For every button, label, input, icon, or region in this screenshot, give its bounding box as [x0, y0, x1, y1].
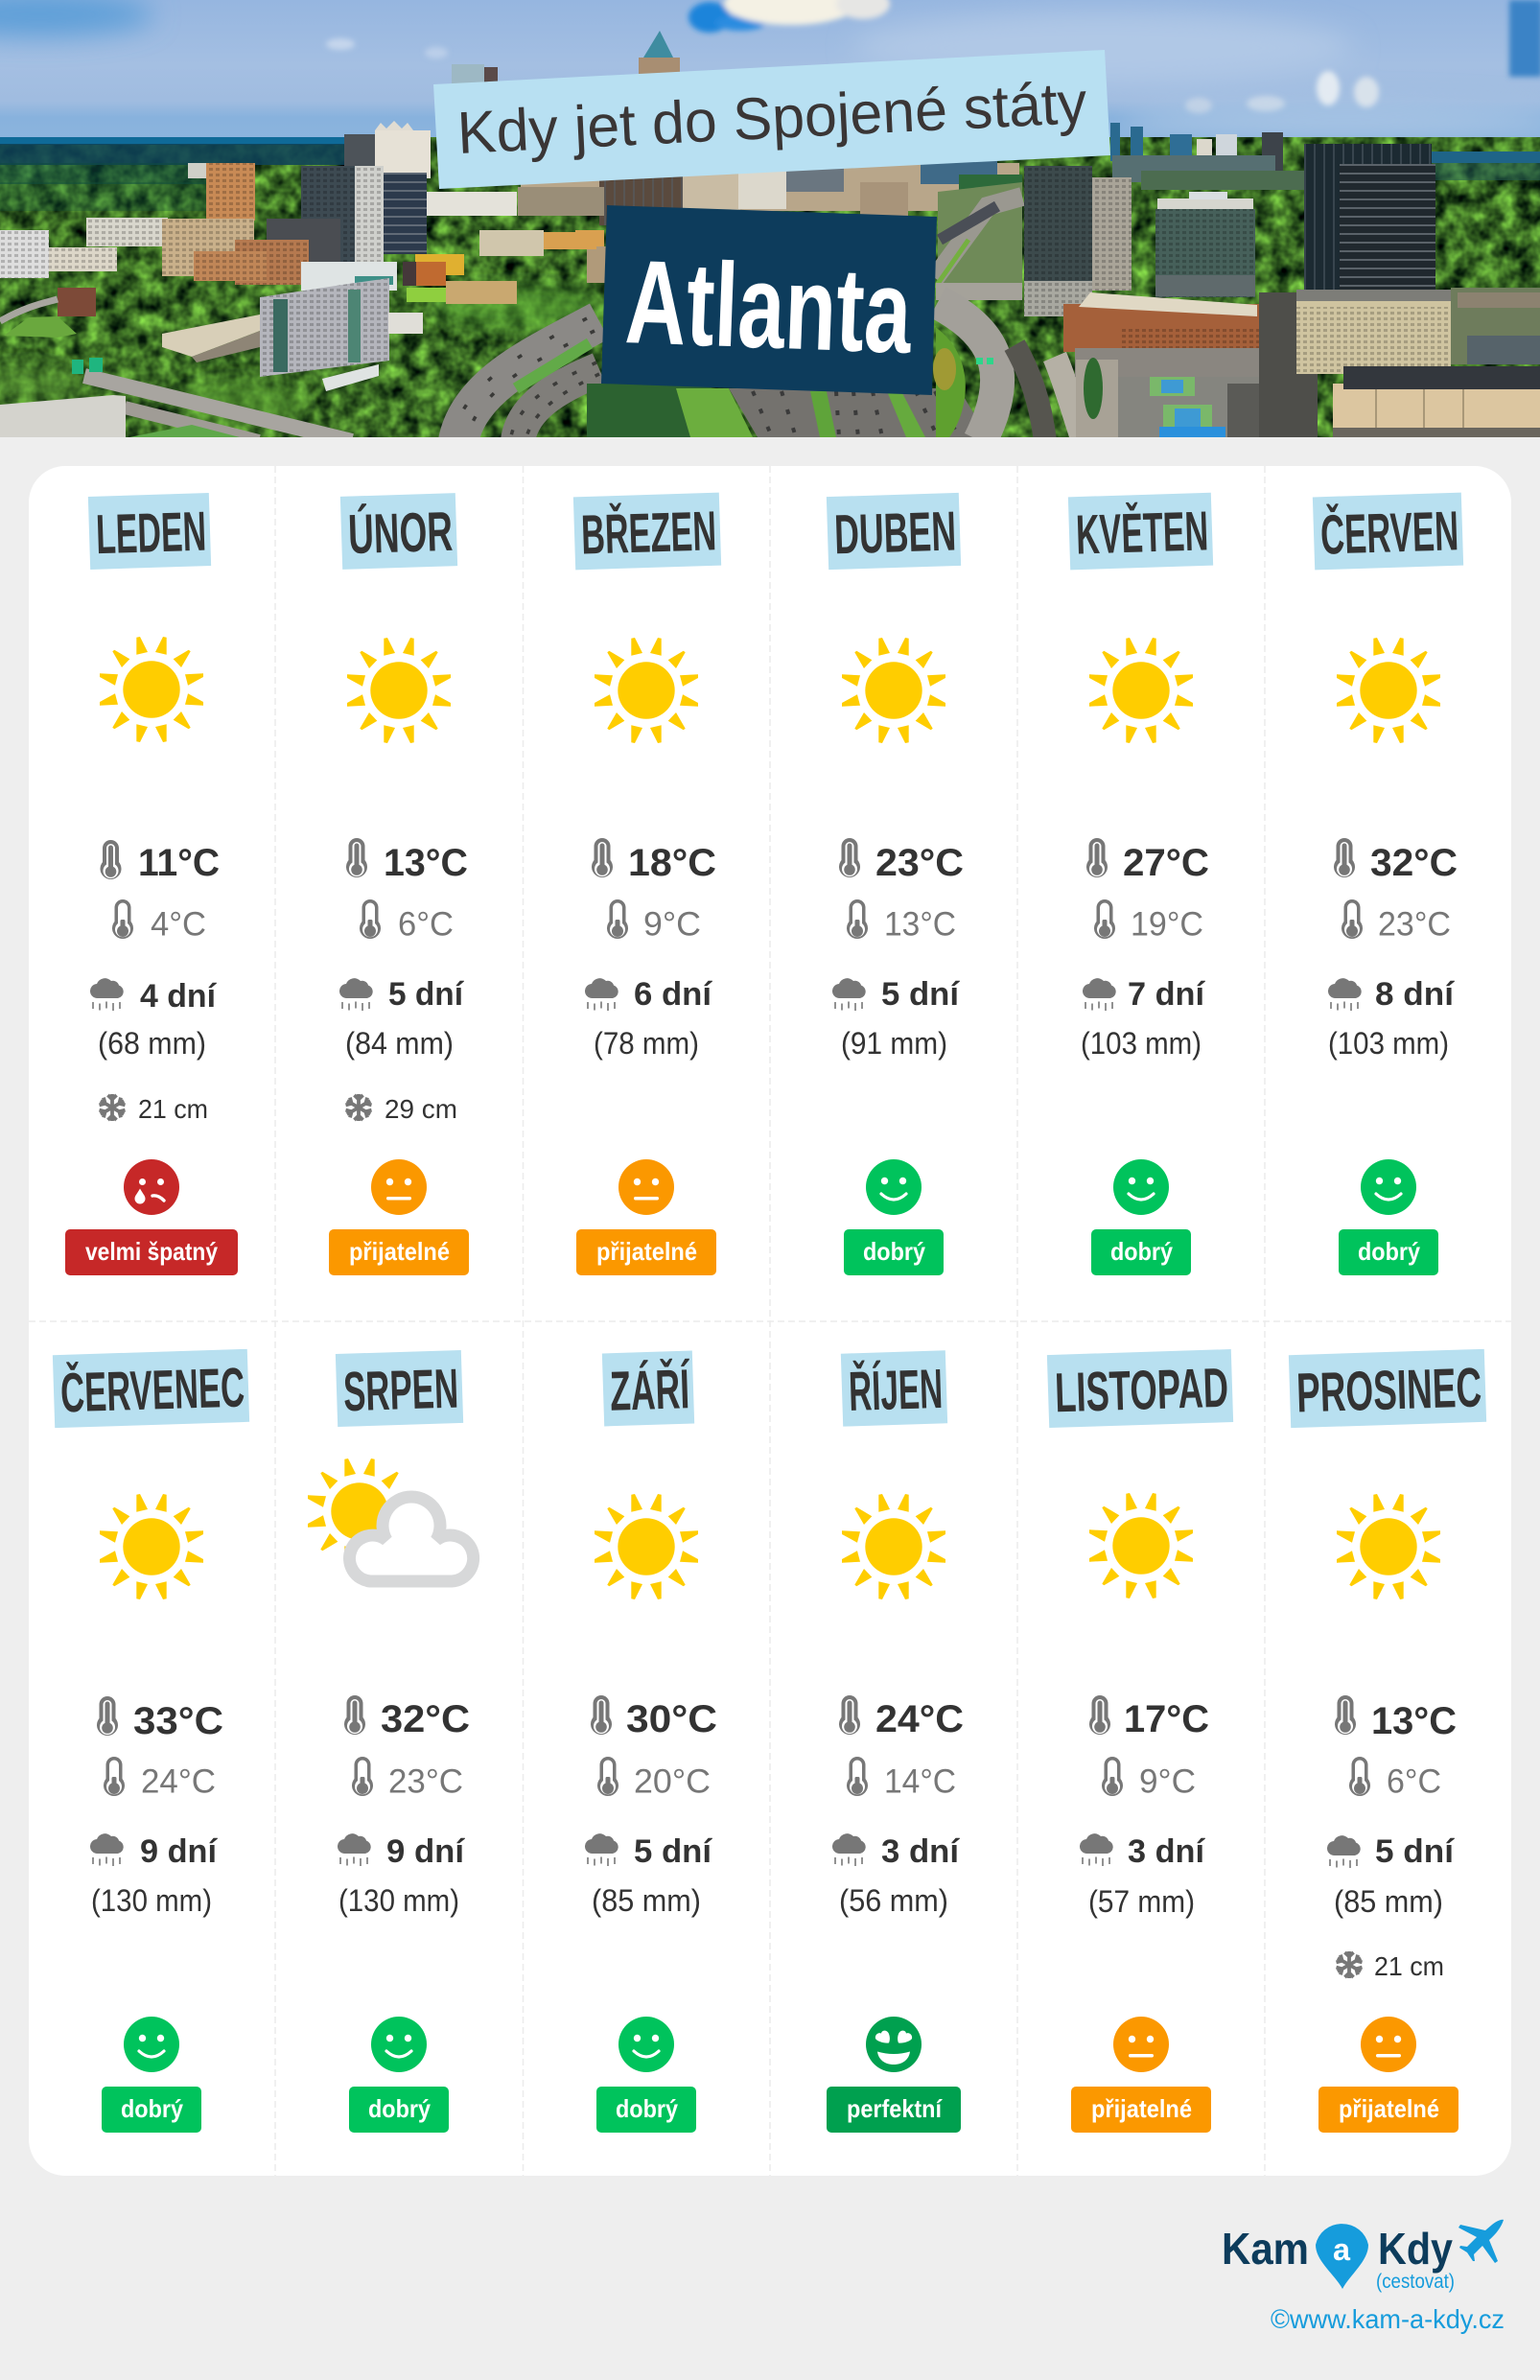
- month tag: [1047, 1349, 1233, 1428]
- icon: thermometer high: [1089, 1695, 1110, 1735]
- min temperature: 9°C: [1139, 1762, 1196, 1801]
- month tag: ZÁŘÍ: [609, 1358, 691, 1423]
- max temperature: 24°C: [875, 1698, 964, 1740]
- icon: rain cloud: [832, 1833, 866, 1866]
- icon: snowflake: [1336, 1951, 1363, 1978]
- rating badge: [102, 2087, 201, 2133]
- max temperature: 30°C: [626, 1698, 717, 1740]
- max temperature: 13°C: [384, 842, 468, 884]
- icon: sun: [595, 1494, 698, 1599]
- icon: rain cloud: [339, 978, 373, 1011]
- month tag: SRPEN: [342, 1358, 459, 1423]
- min temperature: 6°C: [1387, 1762, 1441, 1801]
- icon: thermometer low: [112, 899, 133, 939]
- icon: sun: [100, 1494, 203, 1599]
- icon: sun: [595, 638, 698, 743]
- icon: heart-eyes face: [866, 2017, 922, 2072]
- icon: thermometer high: [344, 1695, 365, 1735]
- precipitation: (85 mm): [592, 1883, 701, 1918]
- max temperature: 13°C: [1371, 1700, 1457, 1742]
- rating badge: [827, 2087, 961, 2133]
- logo: Kam a Kdy: Kam: [1222, 2224, 1309, 2274]
- rating badge: [596, 2087, 696, 2133]
- rating badge: dobrý: [616, 2094, 678, 2123]
- snowfall: 21 cm: [138, 1094, 208, 1124]
- icon: thermometer high: [100, 840, 121, 879]
- panel: listopad: [1047, 1349, 1233, 2133]
- rating badge: velmi špatný: [85, 1237, 218, 1266]
- rainy days: 5 dní: [634, 1833, 713, 1870]
- precipitation: (130 mm): [338, 1883, 459, 1918]
- icon: neutral face: [371, 1159, 427, 1215]
- logo: Kam a Kdy: Kdy: [1378, 2224, 1453, 2274]
- rainy days: 9 dní: [386, 1833, 466, 1870]
- icon: sun: [842, 638, 945, 743]
- rating badge: [329, 1229, 469, 1275]
- icon: thermometer low: [1349, 1757, 1370, 1796]
- icon: happy face: [1361, 1159, 1416, 1215]
- panel: brezen: [573, 493, 721, 1275]
- rating badge: [65, 1229, 238, 1275]
- icon: thermometer low: [607, 899, 628, 939]
- month tag: [841, 1350, 947, 1427]
- panel: cerven: [1313, 493, 1463, 1275]
- icon: happy face: [124, 2017, 179, 2072]
- icon: sun: [100, 637, 203, 742]
- panel: rijen: [827, 1350, 964, 2133]
- icon: crying face: [124, 1159, 179, 1215]
- panel: srpen: [308, 1350, 474, 2133]
- precipitation: (130 mm): [91, 1883, 212, 1918]
- icon: thermometer low: [104, 1757, 125, 1796]
- icon: thermometer high: [97, 1696, 118, 1736]
- title text: Kdy jet do Spojené státy: [455, 70, 1088, 167]
- snowfall: 29 cm: [385, 1094, 457, 1124]
- min temperature: 23°C: [1378, 905, 1451, 944]
- min temperature: 9°C: [643, 905, 701, 944]
- icon: sun: [1089, 1493, 1193, 1598]
- logo: Kam a Kdy: [1222, 2220, 1504, 2293]
- icon: thermometer low: [360, 899, 381, 939]
- rainy days: 3 dní: [1128, 1833, 1206, 1870]
- rating badge: dobrý: [368, 2094, 431, 2123]
- icon: rain cloud: [90, 978, 124, 1011]
- min temperature: 23°C: [388, 1762, 463, 1801]
- icon: rain cloud: [585, 1833, 618, 1866]
- month tag: [88, 493, 211, 570]
- icon: thermometer low: [597, 1757, 618, 1796]
- icon: happy face: [618, 2017, 674, 2072]
- rating badge: [1091, 1229, 1191, 1275]
- icon: thermometer low: [1342, 899, 1363, 939]
- rainy days: 3 dní: [881, 1833, 961, 1870]
- website url: ©www.kam-a-kdy.cz: [1271, 2304, 1505, 2334]
- rating badge: [1071, 2087, 1211, 2133]
- month tag: [1313, 493, 1463, 570]
- precipitation: (68 mm): [98, 1026, 206, 1061]
- rating badge: přijatelné: [1091, 2094, 1192, 2123]
- icon: rain cloud: [832, 978, 866, 1011]
- panel: prosinec: [1289, 1349, 1486, 2133]
- rainy days: 4 dní: [140, 978, 218, 1015]
- icon: sun: [1337, 1494, 1440, 1599]
- icon: rain cloud: [1083, 978, 1116, 1011]
- month tag: KVĚTEN: [1075, 500, 1209, 567]
- month tag: DUBEN: [833, 500, 957, 566]
- rainy days: 5 dní: [1375, 1833, 1456, 1870]
- max temperature: 32°C: [381, 1698, 470, 1740]
- icon: thermometer high: [592, 838, 613, 877]
- icon: thermometer high: [591, 1695, 612, 1735]
- rainy days: 5 dní: [388, 976, 465, 1013]
- panel: unor: [329, 493, 469, 1275]
- max temperature: 33°C: [133, 1700, 223, 1742]
- icon: neutral face: [1361, 2017, 1416, 2072]
- icon: neutral face: [1113, 2017, 1169, 2072]
- rainy days: 9 dní: [140, 1833, 219, 1870]
- icon: thermometer low: [847, 1757, 868, 1796]
- icon: thermometer high: [1334, 838, 1355, 877]
- icon: snowflake: [345, 1094, 372, 1121]
- rating badge: [1339, 1229, 1438, 1275]
- icon: rain cloud: [585, 978, 618, 1011]
- month tag: [573, 493, 721, 570]
- icon: thermometer high: [839, 838, 860, 877]
- city name banner: [601, 205, 937, 395]
- icon: thermometer high: [346, 838, 367, 877]
- panel: cervenec: [53, 1349, 249, 2133]
- rating badge: dobrý: [1110, 1237, 1173, 1266]
- panel: zari: [585, 1351, 717, 2133]
- icon: thermometer high: [1335, 1695, 1356, 1735]
- panel: leden: [65, 493, 238, 1275]
- icon: sun: [1337, 638, 1440, 743]
- snowfall: 21 cm: [1374, 1951, 1444, 1981]
- ground: [0, 137, 1540, 437]
- month tag: BŘEZEN: [580, 500, 717, 567]
- month tag: ÚNOR: [347, 501, 454, 566]
- icon: thermometer high: [1086, 838, 1108, 877]
- month tag: LEDEN: [95, 501, 207, 566]
- precipitation: (103 mm): [1328, 1026, 1449, 1061]
- icon: rain cloud: [1080, 1833, 1113, 1866]
- max temperature: 17°C: [1124, 1698, 1209, 1740]
- icon: thermometer low: [847, 899, 868, 939]
- far skyline: [1110, 123, 1120, 161]
- icon: snowflake: [99, 1094, 126, 1121]
- right side: [938, 182, 1022, 288]
- icon: thermometer low: [352, 1757, 373, 1796]
- min temperature: 24°C: [141, 1762, 216, 1801]
- month tag: LISTOPAD: [1054, 1357, 1229, 1424]
- month tag: [602, 1351, 694, 1426]
- rating badge: dobrý: [863, 1237, 925, 1266]
- icon: rain cloud: [90, 1833, 124, 1866]
- icon: map pin: a: [1333, 2232, 1350, 2267]
- rainy days: 6 dní: [634, 976, 713, 1013]
- rating badge: [844, 1229, 944, 1275]
- icon: happy face: [866, 1159, 922, 1215]
- rating badge: perfektní: [847, 2094, 943, 2123]
- precipitation: (91 mm): [841, 1026, 947, 1061]
- max temperature: 18°C: [628, 842, 716, 884]
- rating badge: dobrý: [121, 2094, 183, 2123]
- icon: thermometer low: [1094, 899, 1115, 939]
- rating badge: [1318, 2087, 1458, 2133]
- icon: sun behind cloud: [308, 1458, 474, 1581]
- icon: sun: [842, 1494, 945, 1599]
- min temperature: 20°C: [634, 1762, 711, 1801]
- month tag: [336, 1350, 463, 1427]
- panel: duben: [827, 493, 964, 1275]
- rainy days: 7 dní: [1128, 976, 1206, 1013]
- icon: sun: [1089, 638, 1193, 743]
- min temperature: 4°C: [151, 905, 206, 944]
- precipitation: (78 mm): [594, 1026, 699, 1061]
- min temperature: 19°C: [1131, 905, 1203, 944]
- city name: Atlanta: [623, 236, 915, 379]
- month tag: [53, 1349, 249, 1428]
- min temperature: 13°C: [884, 905, 956, 944]
- rainy days: 8 dní: [1375, 976, 1456, 1013]
- month tag: [1068, 493, 1213, 570]
- icon: rain cloud: [338, 1833, 371, 1866]
- rating badge: dobrý: [1358, 1237, 1420, 1266]
- mid buildings behind title: [521, 163, 1019, 211]
- precipitation: (84 mm): [345, 1026, 454, 1061]
- max temperature: 27°C: [1123, 842, 1209, 884]
- rating badge: přijatelné: [1339, 2094, 1439, 2123]
- rating badge: [349, 2087, 449, 2133]
- month tag: [827, 493, 961, 570]
- rating badge: přijatelné: [596, 1237, 697, 1266]
- icon: airplane: [1458, 2220, 1504, 2263]
- header photo: Atlanta skyline: [0, 0, 1540, 441]
- min temperature: 14°C: [884, 1762, 956, 1801]
- precipitation: (57 mm): [1088, 1884, 1195, 1919]
- max temperature: 23°C: [875, 842, 964, 884]
- precipitation: (103 mm): [1081, 1026, 1202, 1061]
- left buildings: [344, 134, 375, 166]
- icon: thermometer low: [1102, 1757, 1123, 1796]
- title banner: [433, 50, 1110, 189]
- panel: kveten: [1068, 493, 1213, 1275]
- icon: map pin: [1316, 2224, 1368, 2289]
- icon: rain cloud: [1328, 978, 1362, 1011]
- logo: Kam a Kdy: (cestovat): [1376, 2271, 1455, 2293]
- icon: thermometer high: [839, 1695, 860, 1735]
- rating badge: přijatelné: [349, 1237, 450, 1266]
- main card: [29, 466, 1511, 2176]
- max temperature: 11°C: [138, 842, 220, 884]
- bottom-left roads and roof: [84, 376, 352, 441]
- icon: rain cloud: [1327, 1835, 1361, 1868]
- month tag: ŘÍJEN: [848, 1358, 944, 1423]
- min temperature: 6°C: [398, 905, 454, 944]
- rainy days: 5 dní: [881, 976, 961, 1013]
- month tag: [340, 493, 457, 570]
- central road: [587, 384, 712, 437]
- icon: neutral face: [618, 1159, 674, 1215]
- icon: happy face: [371, 2017, 427, 2072]
- precipitation: (56 mm): [839, 1883, 948, 1918]
- max temperature: 32°C: [1370, 842, 1458, 884]
- precipitation: (85 mm): [1334, 1884, 1443, 1919]
- rating badge: [576, 1229, 716, 1275]
- icon: sun: [347, 638, 451, 743]
- month tag: ČERVENEC: [59, 1356, 245, 1424]
- icon: happy face: [1113, 1159, 1169, 1215]
